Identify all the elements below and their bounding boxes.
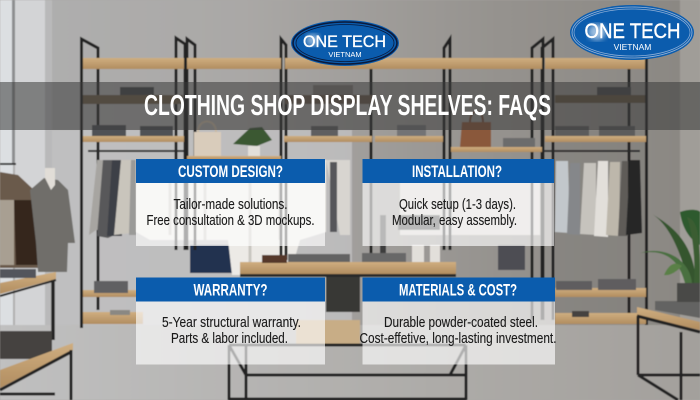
panel: custom design: Free consultation & 3D mockups. xyxy=(146,212,314,229)
left hanging rail with garments xyxy=(88,151,184,238)
logo: center: ONE TECH xyxy=(303,32,386,51)
title banner xyxy=(0,82,700,130)
logo: top right xyxy=(570,5,694,60)
floor xyxy=(0,325,700,400)
logo: top right: VIETNAM xyxy=(614,42,651,52)
display tables xyxy=(0,253,700,400)
panel: materials and cost: MATERIALS & COST? xyxy=(399,282,517,300)
wooden shelves xyxy=(83,58,646,324)
panel: installation: INSTALLATION? xyxy=(412,163,502,181)
panel: warranty: 5-Year structural warranty. xyxy=(162,314,301,331)
right wall panel xyxy=(680,0,700,325)
panel: installation: Modular, easy assembly. xyxy=(392,212,517,229)
logo: center: VIETNAM xyxy=(328,50,362,59)
panel: installation: Quick setup (1-3 days). xyxy=(399,196,516,213)
panel: custom design xyxy=(136,159,325,246)
panel: warranty: WARRANTY? xyxy=(194,282,268,300)
left mannequin and clothes rack xyxy=(0,164,75,272)
window and column xyxy=(0,0,645,330)
right hanging rail with garments xyxy=(543,151,642,237)
panel: custom design: CUSTOM DESIGN? xyxy=(178,163,283,181)
panel: warranty xyxy=(136,278,325,364)
panel: installation xyxy=(362,159,554,246)
shelf uprights and frames xyxy=(82,38,646,328)
folded clothes and accessories on shelves xyxy=(92,85,636,317)
panel: warranty: Parts & labor included. xyxy=(171,330,288,347)
panel: materials and cost xyxy=(360,278,556,364)
central hanging white garments xyxy=(136,160,540,275)
potted plant xyxy=(640,210,700,302)
panel: materials and cost: Durable powder-coated steel. xyxy=(384,314,538,331)
panel: materials and cost: Cost-effetive, long-lasting investment. xyxy=(360,330,556,347)
logo: center xyxy=(291,20,399,66)
panel: custom design: Tailor-made solutions. xyxy=(174,196,288,213)
logo: top right: ONE TECH xyxy=(584,20,680,43)
